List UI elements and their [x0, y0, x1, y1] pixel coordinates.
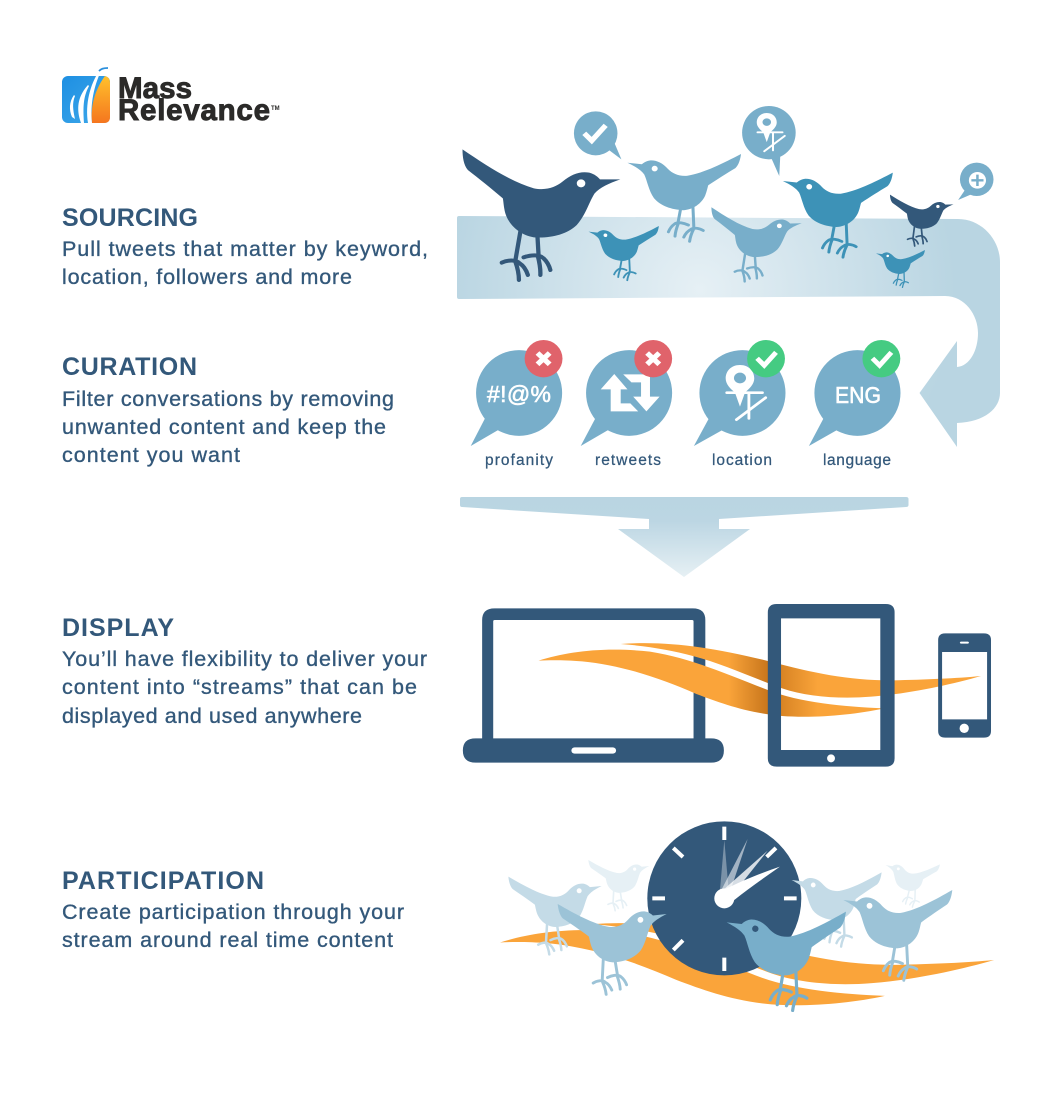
bird: faint left [588, 854, 654, 913]
panel: curation text [62, 353, 394, 467]
stream: orange ribbons [500, 923, 994, 1005]
heading: participation: PARTICIPATION [62, 867, 264, 895]
panel: display text [62, 614, 427, 728]
illustration: devices with content streams [463, 604, 991, 767]
bird: small teal [583, 219, 659, 283]
icon: plus speech bubble [958, 163, 994, 200]
logo wordmark: TM [271, 106, 280, 112]
icon: location bubble [694, 340, 785, 469]
bird: mid left [558, 892, 675, 999]
icon: location speech bubble [742, 106, 796, 176]
heading: sourcing: SOURCING [62, 204, 198, 232]
logo wordmark [118, 72, 280, 127]
text: sourcing description [62, 237, 428, 289]
stream: orange ribbons [539, 643, 981, 717]
text: curation description: content you want [62, 443, 240, 467]
icon: check speech bubble [574, 111, 621, 159]
icon: laptop [463, 608, 724, 763]
bird: large dark [462, 149, 620, 280]
logo mark [62, 68, 110, 123]
text: participation description [62, 900, 404, 952]
label: retweets: retweets [595, 452, 661, 469]
logo [62, 68, 280, 127]
heading: display: DISPLAY [62, 614, 174, 642]
icon: language bubble [809, 340, 900, 469]
arrow: wide down arrow [460, 497, 908, 577]
filter icons: curation [471, 340, 900, 469]
bird: pale right [785, 862, 882, 950]
heading: curation: CURATION [62, 353, 197, 381]
text: display description [62, 647, 427, 728]
bird: light top [618, 142, 741, 246]
text: participation description: stream around real time content [62, 928, 393, 952]
panel: sourcing text [62, 204, 428, 289]
icon: clock [647, 821, 801, 975]
bird: front centre [718, 899, 846, 1015]
icon: phone [938, 633, 991, 738]
logo wordmark: Mass [118, 72, 192, 105]
icon: profanity bubble: #!@% [487, 381, 551, 407]
bird: faint right [879, 854, 940, 911]
illustration: clock, birds and streams [500, 821, 994, 1015]
text: display description: You’ll have flexibility to deliver your [62, 647, 427, 671]
text: display description: content into “streams” that can be [62, 675, 417, 699]
text: sourcing description: location, followers and more [62, 265, 352, 289]
icon: profanity bubble [471, 340, 562, 469]
icon: retweets bubble [581, 340, 672, 469]
icon: tablet [768, 604, 895, 767]
label: location: location [712, 452, 772, 469]
text: sourcing description: Pull tweets that matter by keyword, [62, 237, 428, 261]
panel: participation text [62, 867, 404, 952]
icon: language bubble: ENG [835, 382, 881, 408]
illustration: flock of birds with speech bubbles [462, 106, 994, 289]
label: language: language [823, 452, 891, 469]
logo wordmark: Relevance [118, 94, 270, 127]
arrow: sourcing band curving into curation [457, 216, 1000, 447]
bird: small teal right [872, 244, 925, 289]
text: curation description [62, 387, 394, 467]
text: display description: displayed and used anywhere [62, 704, 362, 728]
text: curation description: unwanted content and keep the [62, 415, 386, 439]
bird: pale left [508, 867, 608, 958]
bird: light centre [711, 206, 803, 282]
bird: teal [774, 161, 893, 262]
text: participation description: Create participation through your [62, 900, 404, 924]
text: curation description: Filter conversations by removing [62, 387, 394, 411]
bird: mid right [835, 878, 952, 985]
bird: small dark [890, 192, 955, 247]
label: profanity: profanity [485, 452, 553, 469]
